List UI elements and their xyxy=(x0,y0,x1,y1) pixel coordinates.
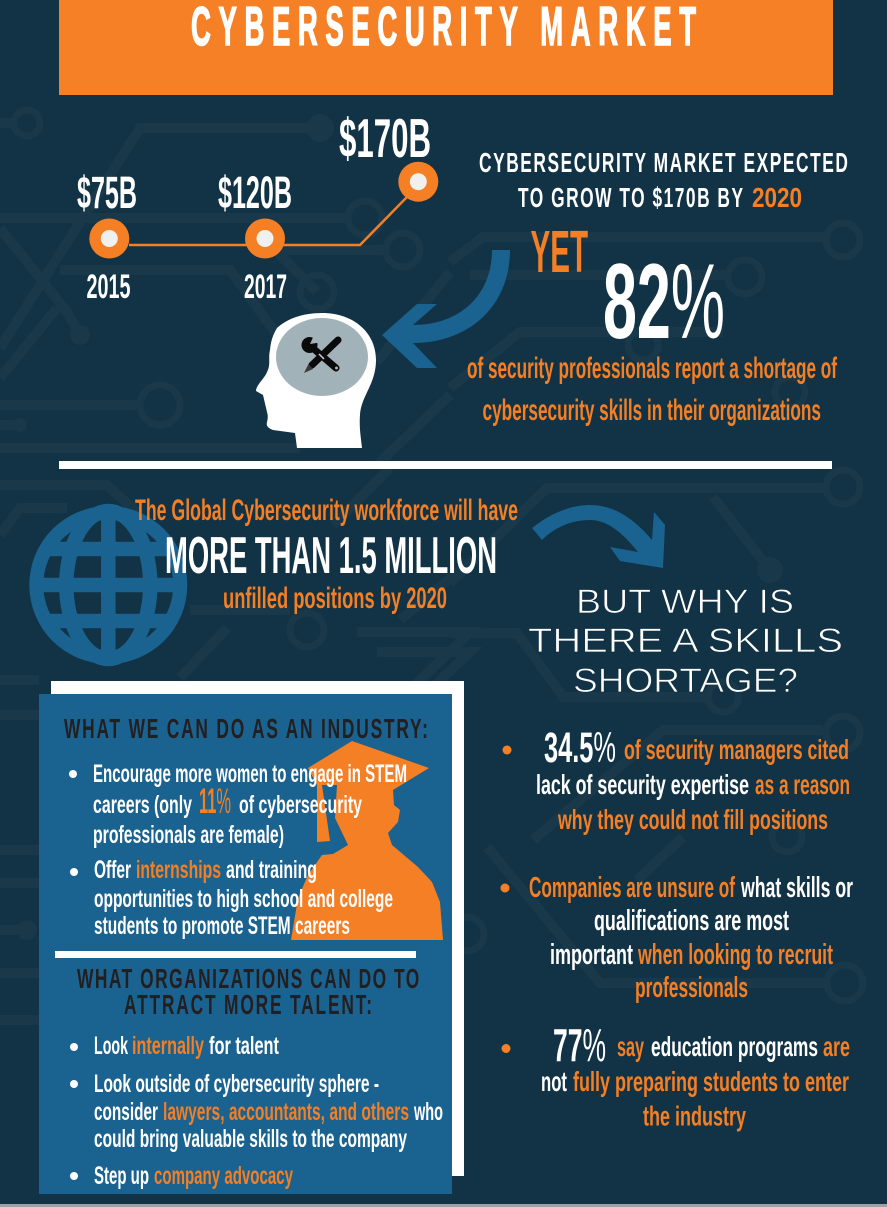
divider rule xyxy=(59,461,832,469)
list: organization actions: company advocacy xyxy=(154,1162,293,1190)
list: organization actions: could bring valuable skills to the company xyxy=(94,1125,407,1153)
list: organization actions: Step up xyxy=(94,1162,149,1190)
reason: companies unsure: important xyxy=(550,939,633,971)
list: industry actions: 11% xyxy=(199,782,231,821)
reason: 77% education programs: the industry xyxy=(643,1100,746,1132)
list: industry actions: internships xyxy=(136,856,221,884)
list: organization actions: for talent xyxy=(209,1032,279,1060)
list: industry actions: students to promote STEM careers xyxy=(94,912,350,940)
reason: 77% education programs xyxy=(502,1019,850,1132)
reason: 77% education programs: not xyxy=(541,1066,567,1097)
reason: 77% education programs: say xyxy=(617,1031,644,1062)
line chart: market growth timeline: 2017 xyxy=(244,268,287,306)
82% statistic: 82% xyxy=(603,241,725,361)
workforce shortfall statement: unfilled positions by 2020 xyxy=(223,582,447,615)
skills shortage description xyxy=(467,352,838,427)
list: industry actions: careers (only xyxy=(93,791,192,819)
market expectation heading: TO GROW TO $170B BY xyxy=(518,182,743,213)
list: organization actions: internally xyxy=(132,1032,204,1060)
line chart: market growth timeline: $75B xyxy=(77,167,137,218)
heading: organizations: ATTRACT MORE TALENT: xyxy=(124,989,372,1020)
icon: head with tools xyxy=(256,313,376,448)
heading: organizations xyxy=(77,963,419,1020)
workforce shortfall statement: MORE THAN 1.5 MILLION xyxy=(165,527,497,585)
yet label: YET xyxy=(530,219,588,285)
line chart: market growth timeline xyxy=(77,107,438,306)
line chart: market growth timeline: $170B xyxy=(339,107,431,169)
reason: companies unsure xyxy=(500,872,853,1004)
heading: organizations: WHAT ORGANIZATIONS CAN DO TO xyxy=(77,963,419,994)
icon: globe xyxy=(25,502,192,669)
graduate silhouette xyxy=(291,741,443,940)
reason: 77% education programs: 77% xyxy=(553,1019,606,1071)
heading: industry: WHAT WE CAN DO AS AN INDUSTRY: xyxy=(64,713,428,744)
question heading: THERE A SKILLS xyxy=(528,622,843,660)
reason: companies unsure: professionals xyxy=(635,972,748,1004)
list: industry actions: of cybersecurity xyxy=(239,791,362,819)
list: industry actions xyxy=(69,760,407,940)
list: organization actions: Look outside of cybersecurity sphere - xyxy=(94,1070,379,1098)
list: organization actions: who xyxy=(413,1098,443,1126)
list: organization actions xyxy=(70,1032,443,1190)
market expectation heading: CYBERSECURITY MARKET EXPECTED xyxy=(479,147,848,178)
list: industry actions: opportunities to high school and college xyxy=(94,885,393,913)
question heading xyxy=(528,583,843,700)
list: organization actions: Look xyxy=(94,1032,128,1060)
line chart: market growth timeline: $120B xyxy=(218,167,292,218)
reason: 77% education programs: are xyxy=(823,1031,850,1062)
list: industry actions: Offer xyxy=(94,856,131,884)
reason: 34.5% of managers: 34.5% xyxy=(544,724,616,772)
header banner xyxy=(59,0,833,95)
line chart: market growth timeline: 2015 xyxy=(86,268,130,306)
market expectation heading: 2020 xyxy=(752,182,802,213)
list: industry actions: professionals are female) xyxy=(93,821,284,849)
panel: industry and organization actions xyxy=(39,681,464,1194)
list: industry actions: Encourage more women to engage in STEM xyxy=(93,760,407,788)
list: organization actions: lawyers, accountants, and others xyxy=(163,1098,409,1126)
reason: companies unsure: Companies are unsure of xyxy=(529,872,735,904)
workforce shortfall statement xyxy=(135,494,518,615)
arrow: curved arrow to question xyxy=(532,505,665,568)
reason: 34.5% of managers xyxy=(502,724,850,835)
workforce shortfall statement: The Global Cybersecurity workforce will have xyxy=(135,494,518,527)
question heading: SHORTAGE? xyxy=(573,662,798,700)
market expectation heading xyxy=(479,147,848,213)
question heading: BUT WHY IS xyxy=(576,583,794,621)
arrow: curved blue arrow to head xyxy=(382,250,510,368)
icon: wrench and pencil xyxy=(302,333,338,373)
reason: 34.5% of managers: lack of security expertise xyxy=(536,769,749,800)
list: organization actions: consider xyxy=(94,1098,158,1126)
list: industry actions: and training xyxy=(226,856,317,884)
inner divider xyxy=(55,951,416,958)
